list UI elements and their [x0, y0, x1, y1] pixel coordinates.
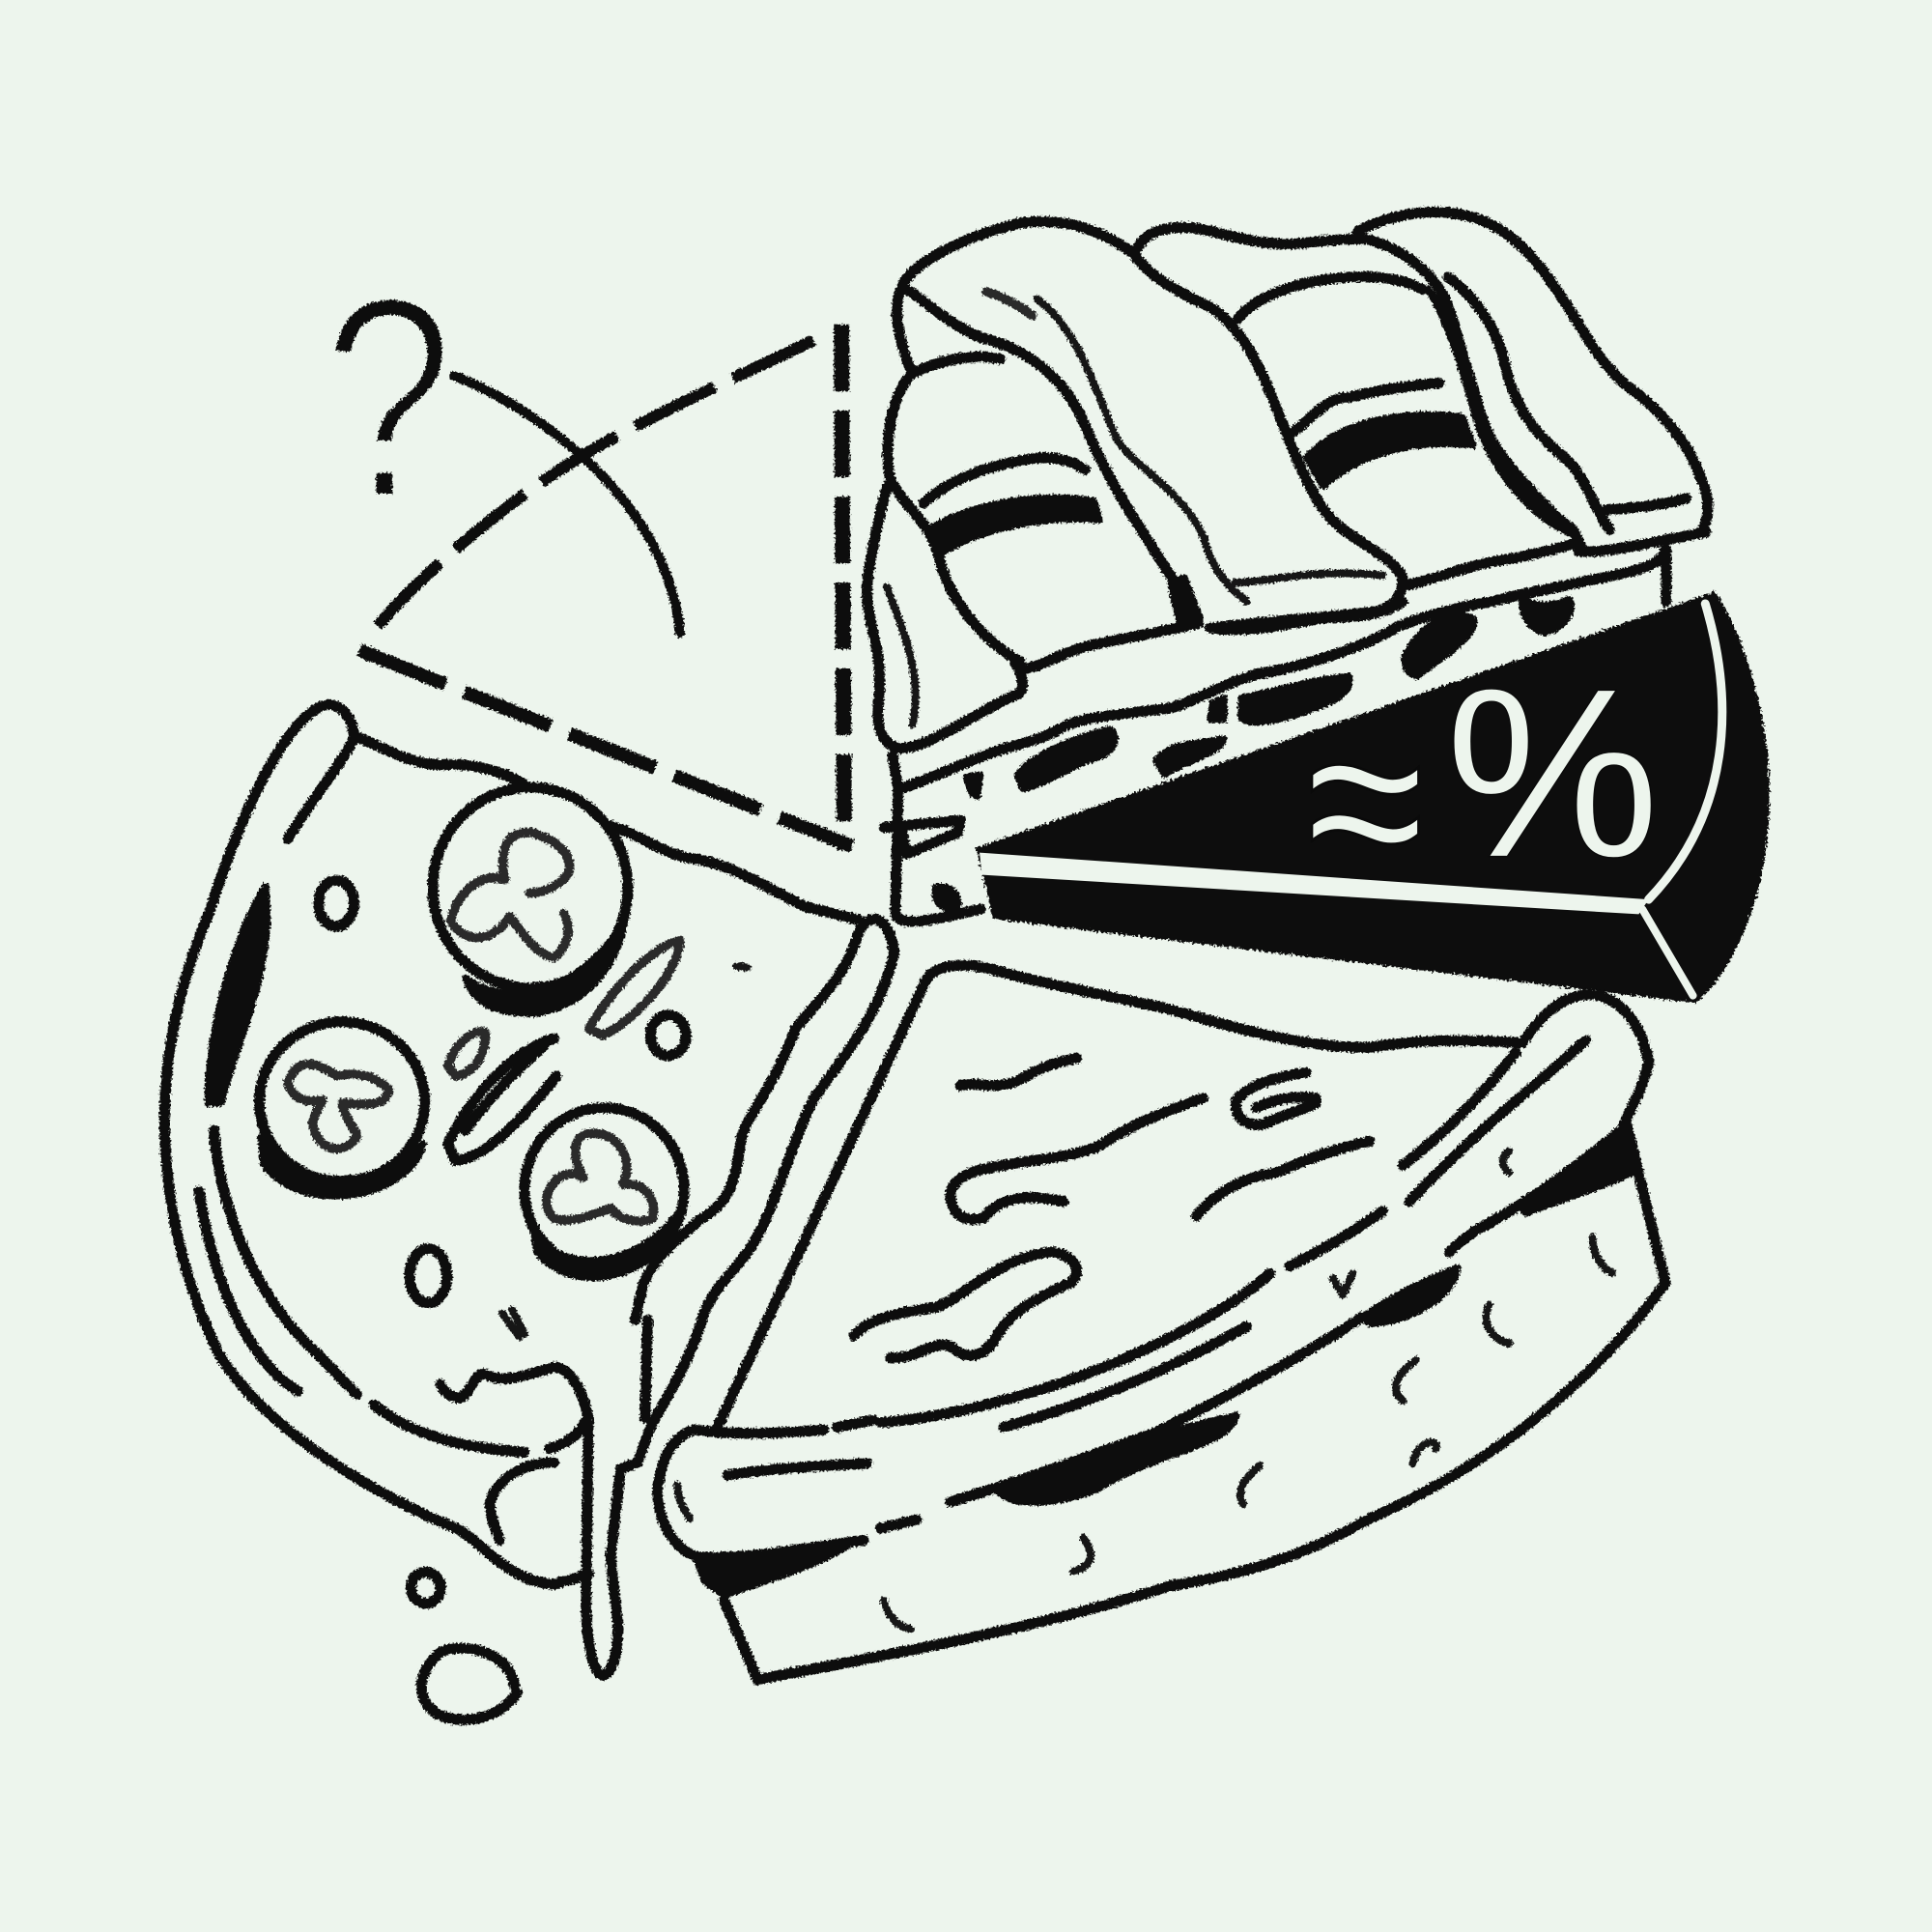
- crust cap: [288, 705, 355, 838]
- crust shadow patches: [697, 1124, 1633, 1596]
- filling blobs: [935, 599, 1572, 908]
- pepperoni 2: [259, 1022, 425, 1196]
- slice: dark slice with approx percent label: [976, 591, 1770, 1003]
- right lattice strip: [1357, 213, 1708, 552]
- small rings and olives: [319, 880, 747, 1337]
- dashed arc edge: [378, 339, 816, 626]
- middle lattice strip and cell: [1136, 228, 1581, 584]
- percent sign: %: [1445, 638, 1660, 907]
- dashed right edge: [841, 325, 844, 850]
- crumb ticks: [677, 1151, 1612, 1629]
- top edge: [356, 737, 860, 921]
- surface streaks: [854, 1058, 1370, 1358]
- top surface edges: [718, 965, 1522, 1428]
- falling crumbs: [412, 1572, 517, 1719]
- front lattice strip: [901, 221, 1403, 630]
- left lattice cell: [888, 290, 1201, 669]
- left overhanging flap: [867, 486, 1022, 749]
- cut crust strip and drip: [586, 919, 895, 1676]
- pepperoni 1: [433, 787, 628, 1013]
- missing slice: dashed outline with question mark: [323, 237, 852, 850]
- melted cheese: [440, 1368, 588, 1422]
- base outline: [724, 1134, 1665, 1680]
- slice: pepperoni pizza: [164, 705, 895, 1719]
- highlight edges: [980, 853, 1649, 914]
- right cheese edge: [636, 930, 860, 1320]
- question mark: ?: [323, 237, 454, 558]
- slice: quiche: [658, 965, 1665, 1680]
- dark wedge body: [976, 591, 1770, 1003]
- inner crust: [213, 1130, 525, 1452]
- dashed lower edge: [359, 650, 852, 846]
- angle arc: [454, 376, 680, 633]
- pepperoni 3: [525, 1108, 685, 1278]
- outer crust: [164, 710, 588, 1584]
- pie side wall: [884, 549, 1666, 922]
- crust roll: [658, 995, 1649, 1557]
- approx sign: ≈: [1306, 666, 1425, 936]
- slice: lattice pie: [867, 213, 1708, 922]
